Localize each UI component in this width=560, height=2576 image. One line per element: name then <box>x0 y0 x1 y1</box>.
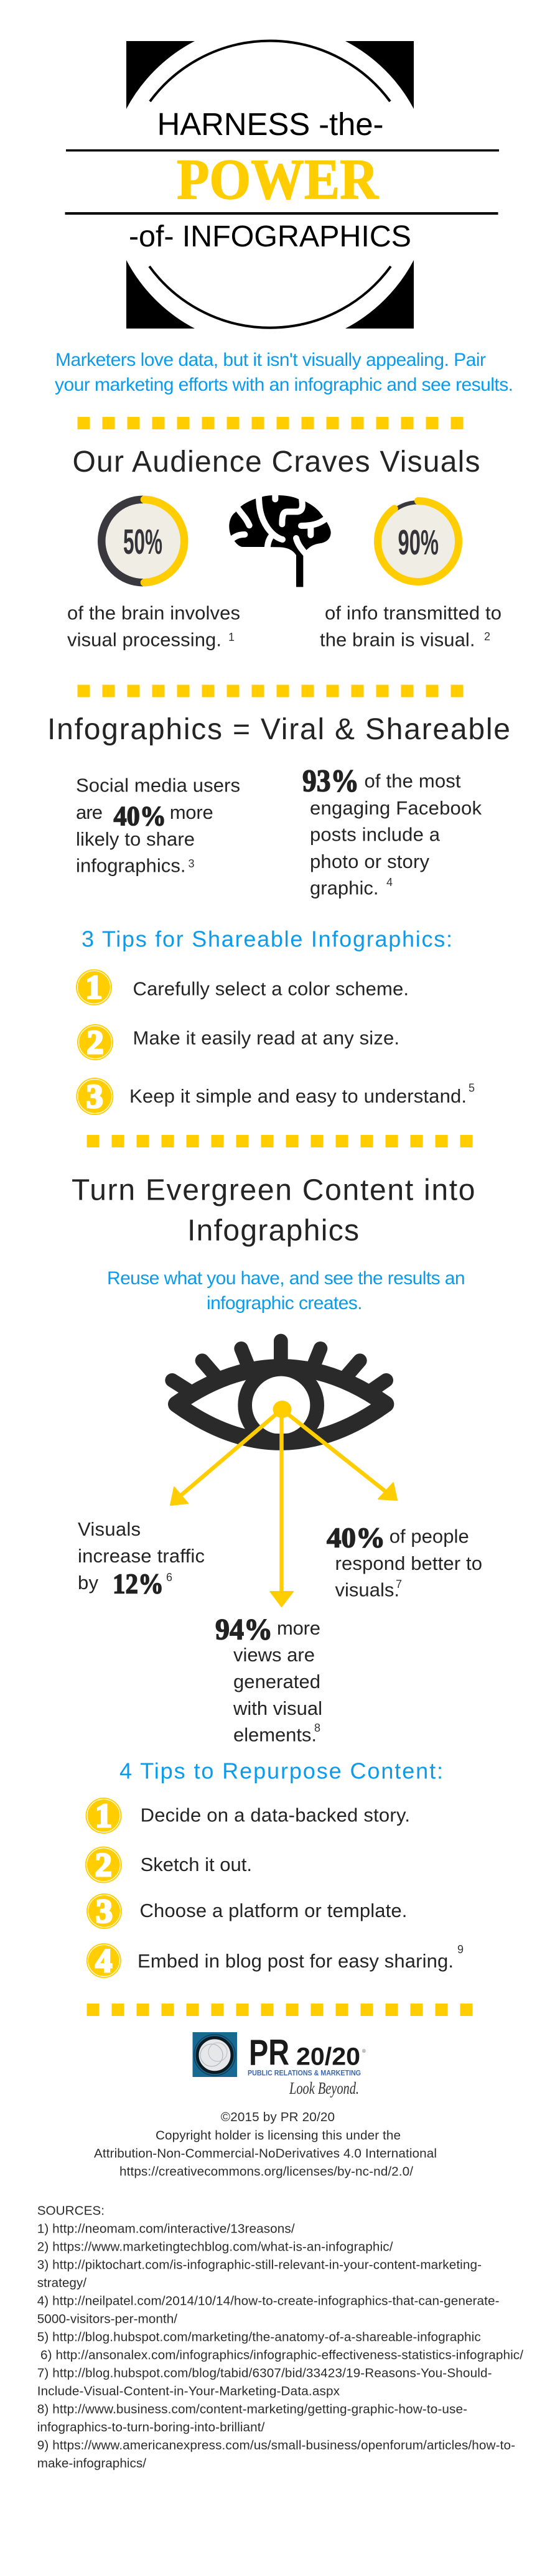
intro text: your marketing efforts with an infographic and see results. <box>55 375 513 395</box>
repurpose tip 2: 2 <box>95 1846 112 1883</box>
repurpose tip 1: Decide on a data-backed story. <box>141 1804 410 1826</box>
stat: 40 percent respond: of people <box>390 1526 469 1547</box>
sources list: 5000-visitors-per-month/ <box>37 2312 177 2326</box>
title line: of infographics: -of- INFOGRAPHICS <box>129 220 411 253</box>
caption: 50 percent: 1 <box>228 631 235 643</box>
title badge <box>65 41 499 329</box>
title line: harness the: HARNESS -the- <box>157 106 383 142</box>
stat: 40 percent social media: likely to share <box>76 828 195 850</box>
title line: power: POWER <box>177 147 379 211</box>
heading: audience craves visuals: Our Audience Craves Visuals <box>72 446 480 478</box>
sources list: 1) http://neomam.com/interactive/13reasons/ <box>37 2221 295 2236</box>
subheading: reuse <box>107 1268 465 1314</box>
logo: PR 20/20: Look Beyond. <box>289 2079 359 2098</box>
heading: 3 tips: 3 Tips for Shareable Infographics: <box>82 926 452 952</box>
tip 1: 1 <box>86 968 102 1006</box>
stat ring: 90 percent: 90% <box>398 523 439 562</box>
heading: evergreen content <box>72 1174 475 1247</box>
stat ring: 50 percent <box>101 500 184 582</box>
stat: 93 percent facebook: photo or story <box>310 851 429 872</box>
repurpose tip 4: Embed in blog post for easy sharing. <box>138 1950 454 1972</box>
stat: 40 percent social media <box>76 775 240 877</box>
stat: 93 percent facebook: graphic. <box>310 877 378 899</box>
stat: 93 percent facebook: 4 <box>386 876 393 889</box>
intro text <box>55 350 513 395</box>
sources list: 9) https://www.americanexpress.com/us/small-business/openforum/articles/how-to- <box>37 2438 515 2452</box>
stat: 94 percent views: views are <box>233 1644 315 1666</box>
stat: 93 percent facebook: 93% <box>302 764 359 799</box>
stat: 94 percent views: generated <box>233 1671 320 1692</box>
stat ring: 50 percent: 50% <box>123 522 162 562</box>
stat: 40 percent respond: 7 <box>396 1578 402 1590</box>
sources list: 4) http://neilpatel.com/2014/10/14/how-to-create-infographics-that-can-generate- <box>37 2294 499 2308</box>
heading: evergreen content: Infographics <box>187 1215 359 1247</box>
repurpose tip 2 <box>85 1846 252 1883</box>
repurpose tip 1: 1 <box>95 1797 112 1834</box>
caption: 50 percent: visual processing. <box>67 629 222 651</box>
repurpose tip 3: Choose a platform or template. <box>139 1900 407 1921</box>
caption: 90 percent: of info transmitted to <box>325 602 502 624</box>
stat: 40 percent social media: Social media users <box>76 775 240 796</box>
stat: 93 percent facebook: posts include a <box>310 824 441 846</box>
copyright block: ©2015 by PR 20/20 <box>221 2110 335 2124</box>
tip 3: 5 <box>469 1081 475 1094</box>
heading: 4 tips: 4 Tips to Repurpose Content: <box>119 1758 443 1784</box>
repurpose tip 4: 9 <box>457 1943 464 1956</box>
repurpose tip 2: Sketch it out. <box>141 1854 252 1875</box>
copyright block: Attribution-Non-Commercial-NoDerivatives 4.0 International <box>94 2146 437 2160</box>
repurpose tip 4 <box>86 1942 464 1979</box>
stat: 40 percent social media: 40% <box>113 801 166 831</box>
sources list: 2) https://www.marketingtechblog.com/what-is-an-infographic/ <box>37 2239 393 2254</box>
tip 3: Keep it simple and easy to understand. <box>129 1085 467 1107</box>
stat: 94 percent views: more <box>277 1617 320 1639</box>
tip 3: 3 <box>86 1078 103 1115</box>
repurpose tip 3 <box>86 1893 407 1930</box>
copyright block: https://creativecommons.org/licenses/by-nc-nd/2.0/ <box>119 2165 413 2179</box>
stat: 12 percent traffic: increase traffic <box>78 1545 205 1567</box>
caption: 90 percent: 2 <box>484 630 490 643</box>
stat: 12 percent traffic: by <box>78 1572 98 1594</box>
sources list: 8) http://www.business.com/content-marketing/getting-graphic-how-to-use- <box>37 2402 467 2416</box>
arrows from the eye <box>170 1401 397 1607</box>
heading: viral and shareable: Infographics = Viral & Shareable <box>47 713 510 746</box>
caption: 90 percent: the brain is visual. <box>320 629 475 651</box>
stat: 12 percent traffic: Visuals <box>78 1518 141 1540</box>
stat ring: 90 percent <box>377 500 459 582</box>
logo: PR 20/20: 20/20 <box>296 2043 360 2070</box>
tip 2 <box>77 1024 399 1061</box>
stat: 40 percent respond <box>327 1522 482 1601</box>
copyright block: Copyright holder is licensing this under the <box>156 2128 401 2142</box>
sources list: make-infographics/ <box>37 2456 146 2470</box>
heading: evergreen content: Turn Evergreen Content into <box>72 1174 475 1206</box>
tip 1 <box>76 968 409 1006</box>
stat: 40 percent social media: 3 <box>188 857 195 870</box>
logo: PR 20/20 <box>193 2032 366 2098</box>
repurpose tip 3: 3 <box>96 1893 113 1930</box>
sources list <box>37 2203 523 2470</box>
tip 2: 2 <box>87 1024 103 1061</box>
subheading: reuse: Reuse what you have, and see the results an <box>107 1268 465 1289</box>
stat: 93 percent facebook: engaging Facebook <box>310 797 482 819</box>
stat: 40 percent social media: more <box>170 801 213 823</box>
subheading: reuse: infographic creates. <box>207 1293 362 1314</box>
stat: 12 percent traffic: 6 <box>166 1571 172 1584</box>
stat: 94 percent views <box>215 1613 322 1746</box>
icon: eye <box>172 1341 386 1442</box>
stat: 93 percent facebook <box>302 764 482 899</box>
sources list: 6) http://ansonalex.com/infographics/infographic-effectiveness-statistics-infographic/ <box>40 2348 523 2362</box>
caption: 50 percent <box>67 602 240 651</box>
stat: 94 percent views: elements. <box>233 1724 317 1746</box>
sources list: SOURCES: <box>37 2203 105 2218</box>
stat: 94 percent views: with visual <box>233 1697 322 1719</box>
stat: 40 percent respond: visuals. <box>335 1579 399 1601</box>
logo: PR 20/20: PUBLIC RELATIONS & MARKETING <box>248 2069 361 2078</box>
stat: 93 percent facebook: of the most <box>365 770 461 792</box>
caption: 90 percent <box>320 602 502 651</box>
caption: 50 percent: of the brain involves <box>67 602 240 624</box>
sources list: infographics-to-turn-boring-into-brilliant/ <box>37 2420 265 2434</box>
tip 3 <box>76 1078 475 1115</box>
stat: 40 percent respond: respond better to <box>335 1552 482 1574</box>
sources list: strategy/ <box>37 2276 86 2290</box>
icon: brain <box>229 493 331 587</box>
repurpose tip 4: 4 <box>95 1942 112 1979</box>
logo: PR 20/20: ® <box>362 2048 366 2054</box>
sources list: 7) http://blog.hubspot.com/blog/tabid/6307/bid/33423/19-Reasons-You-Should- <box>37 2366 492 2380</box>
intro text: Marketers love data, but it isn't visually appealing. Pair <box>55 350 486 370</box>
tip 2: Make it easily read at any size. <box>133 1027 399 1049</box>
sources list: Include-Visual-Content-in-Your-Marketing-Data.aspx <box>37 2384 340 2398</box>
logo: PR 20/20: PR <box>249 2032 289 2073</box>
sources list: 5) http://blog.hubspot.com/marketing/the-anatomy-of-a-shareable-infographic <box>37 2330 481 2344</box>
repurpose tip 1 <box>86 1797 410 1834</box>
stat: 12 percent traffic: 12% <box>113 1568 164 1600</box>
stat: 40 percent social media: infographics. <box>76 855 185 877</box>
sources list: 3) http://piktochart.com/is-infographic-still-relevant-in-your-content-marketing- <box>37 2257 482 2272</box>
stat: 40 percent social media: are <box>76 801 103 823</box>
tip 1: Carefully select a color scheme. <box>133 978 409 1000</box>
stat: 40 percent respond: 40% <box>327 1522 385 1554</box>
stat: 94 percent views: 8 <box>314 1722 320 1734</box>
copyright block <box>94 2110 437 2179</box>
stat: 12 percent traffic <box>78 1518 205 1600</box>
stat: 94 percent views: 94% <box>215 1613 273 1646</box>
